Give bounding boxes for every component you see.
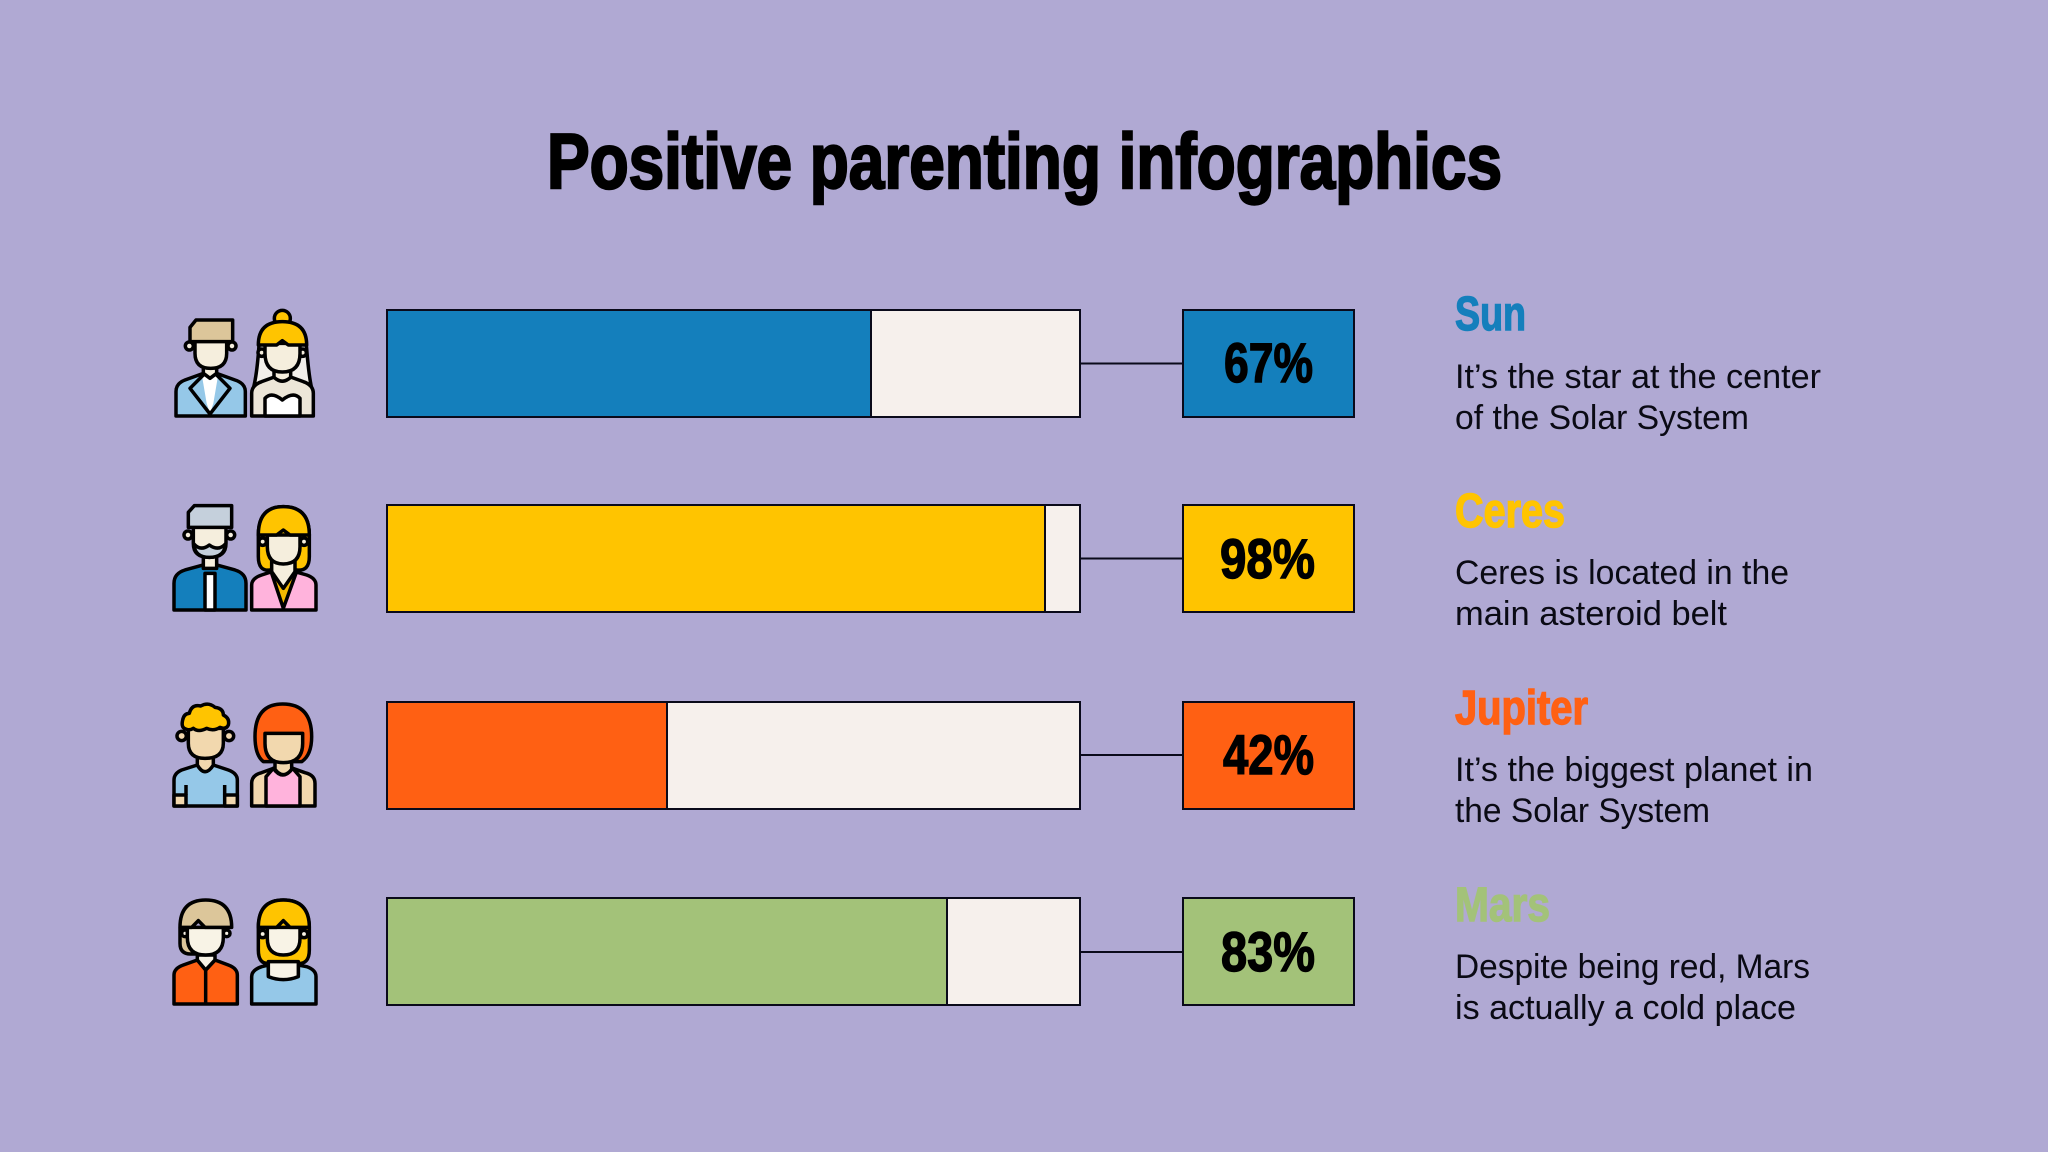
progress bar: 67% [387, 310, 1080, 417]
icon: casual couple [174, 900, 316, 1004]
percentage box: 83% [1183, 898, 1354, 1005]
progress bar: 42% [387, 702, 1080, 809]
connector line [1080, 558, 1183, 560]
label: Ceres: Ceres [1455, 485, 1565, 538]
description: Sun: It’s the star at the center [1455, 358, 1821, 396]
progress bar: 98% [387, 505, 1080, 612]
description: Sun [1455, 358, 1821, 437]
percentage box: 67%: 67% [1224, 331, 1313, 394]
description: Ceres: Ceres is located in the [1455, 554, 1789, 592]
percentage box: 98%: 98% [1220, 527, 1315, 590]
row: Jupiter [174, 682, 1813, 830]
icon: young couple [174, 704, 315, 806]
percentage box: 98% [1183, 505, 1354, 612]
description: Jupiter: the Solar System [1455, 792, 1710, 830]
label: Jupiter: Jupiter [1455, 682, 1588, 735]
progress bar: 83% [387, 898, 1080, 1005]
description: Jupiter: It’s the biggest planet in [1455, 751, 1813, 789]
row: Mars [174, 879, 1810, 1027]
description: Mars: is actually a cold place [1455, 989, 1796, 1027]
description: Sun: of the Solar System [1455, 399, 1749, 437]
row: Ceres [174, 485, 1789, 633]
title: Positive parenting infographics [547, 117, 1502, 205]
label: Sun: Sun [1455, 288, 1526, 341]
percentage box: 42% [1183, 702, 1354, 809]
row: Sun [176, 288, 1821, 437]
description: Ceres [1455, 554, 1789, 633]
connector line [1080, 754, 1183, 756]
percentage box: 67% [1183, 310, 1354, 417]
connector line [1080, 951, 1183, 953]
description: Mars: Despite being red, Mars [1455, 948, 1810, 986]
label: Mars: Mars [1455, 879, 1550, 932]
percentage box: 42%: 42% [1223, 723, 1314, 786]
icon: groom and bride [176, 310, 313, 416]
percentage box: 83%: 83% [1221, 920, 1315, 983]
description: Ceres: main asteroid belt [1455, 595, 1727, 633]
description: Mars [1455, 948, 1810, 1027]
icon: older couple [174, 506, 316, 610]
description: Jupiter [1455, 751, 1813, 830]
connector line [1080, 362, 1183, 364]
